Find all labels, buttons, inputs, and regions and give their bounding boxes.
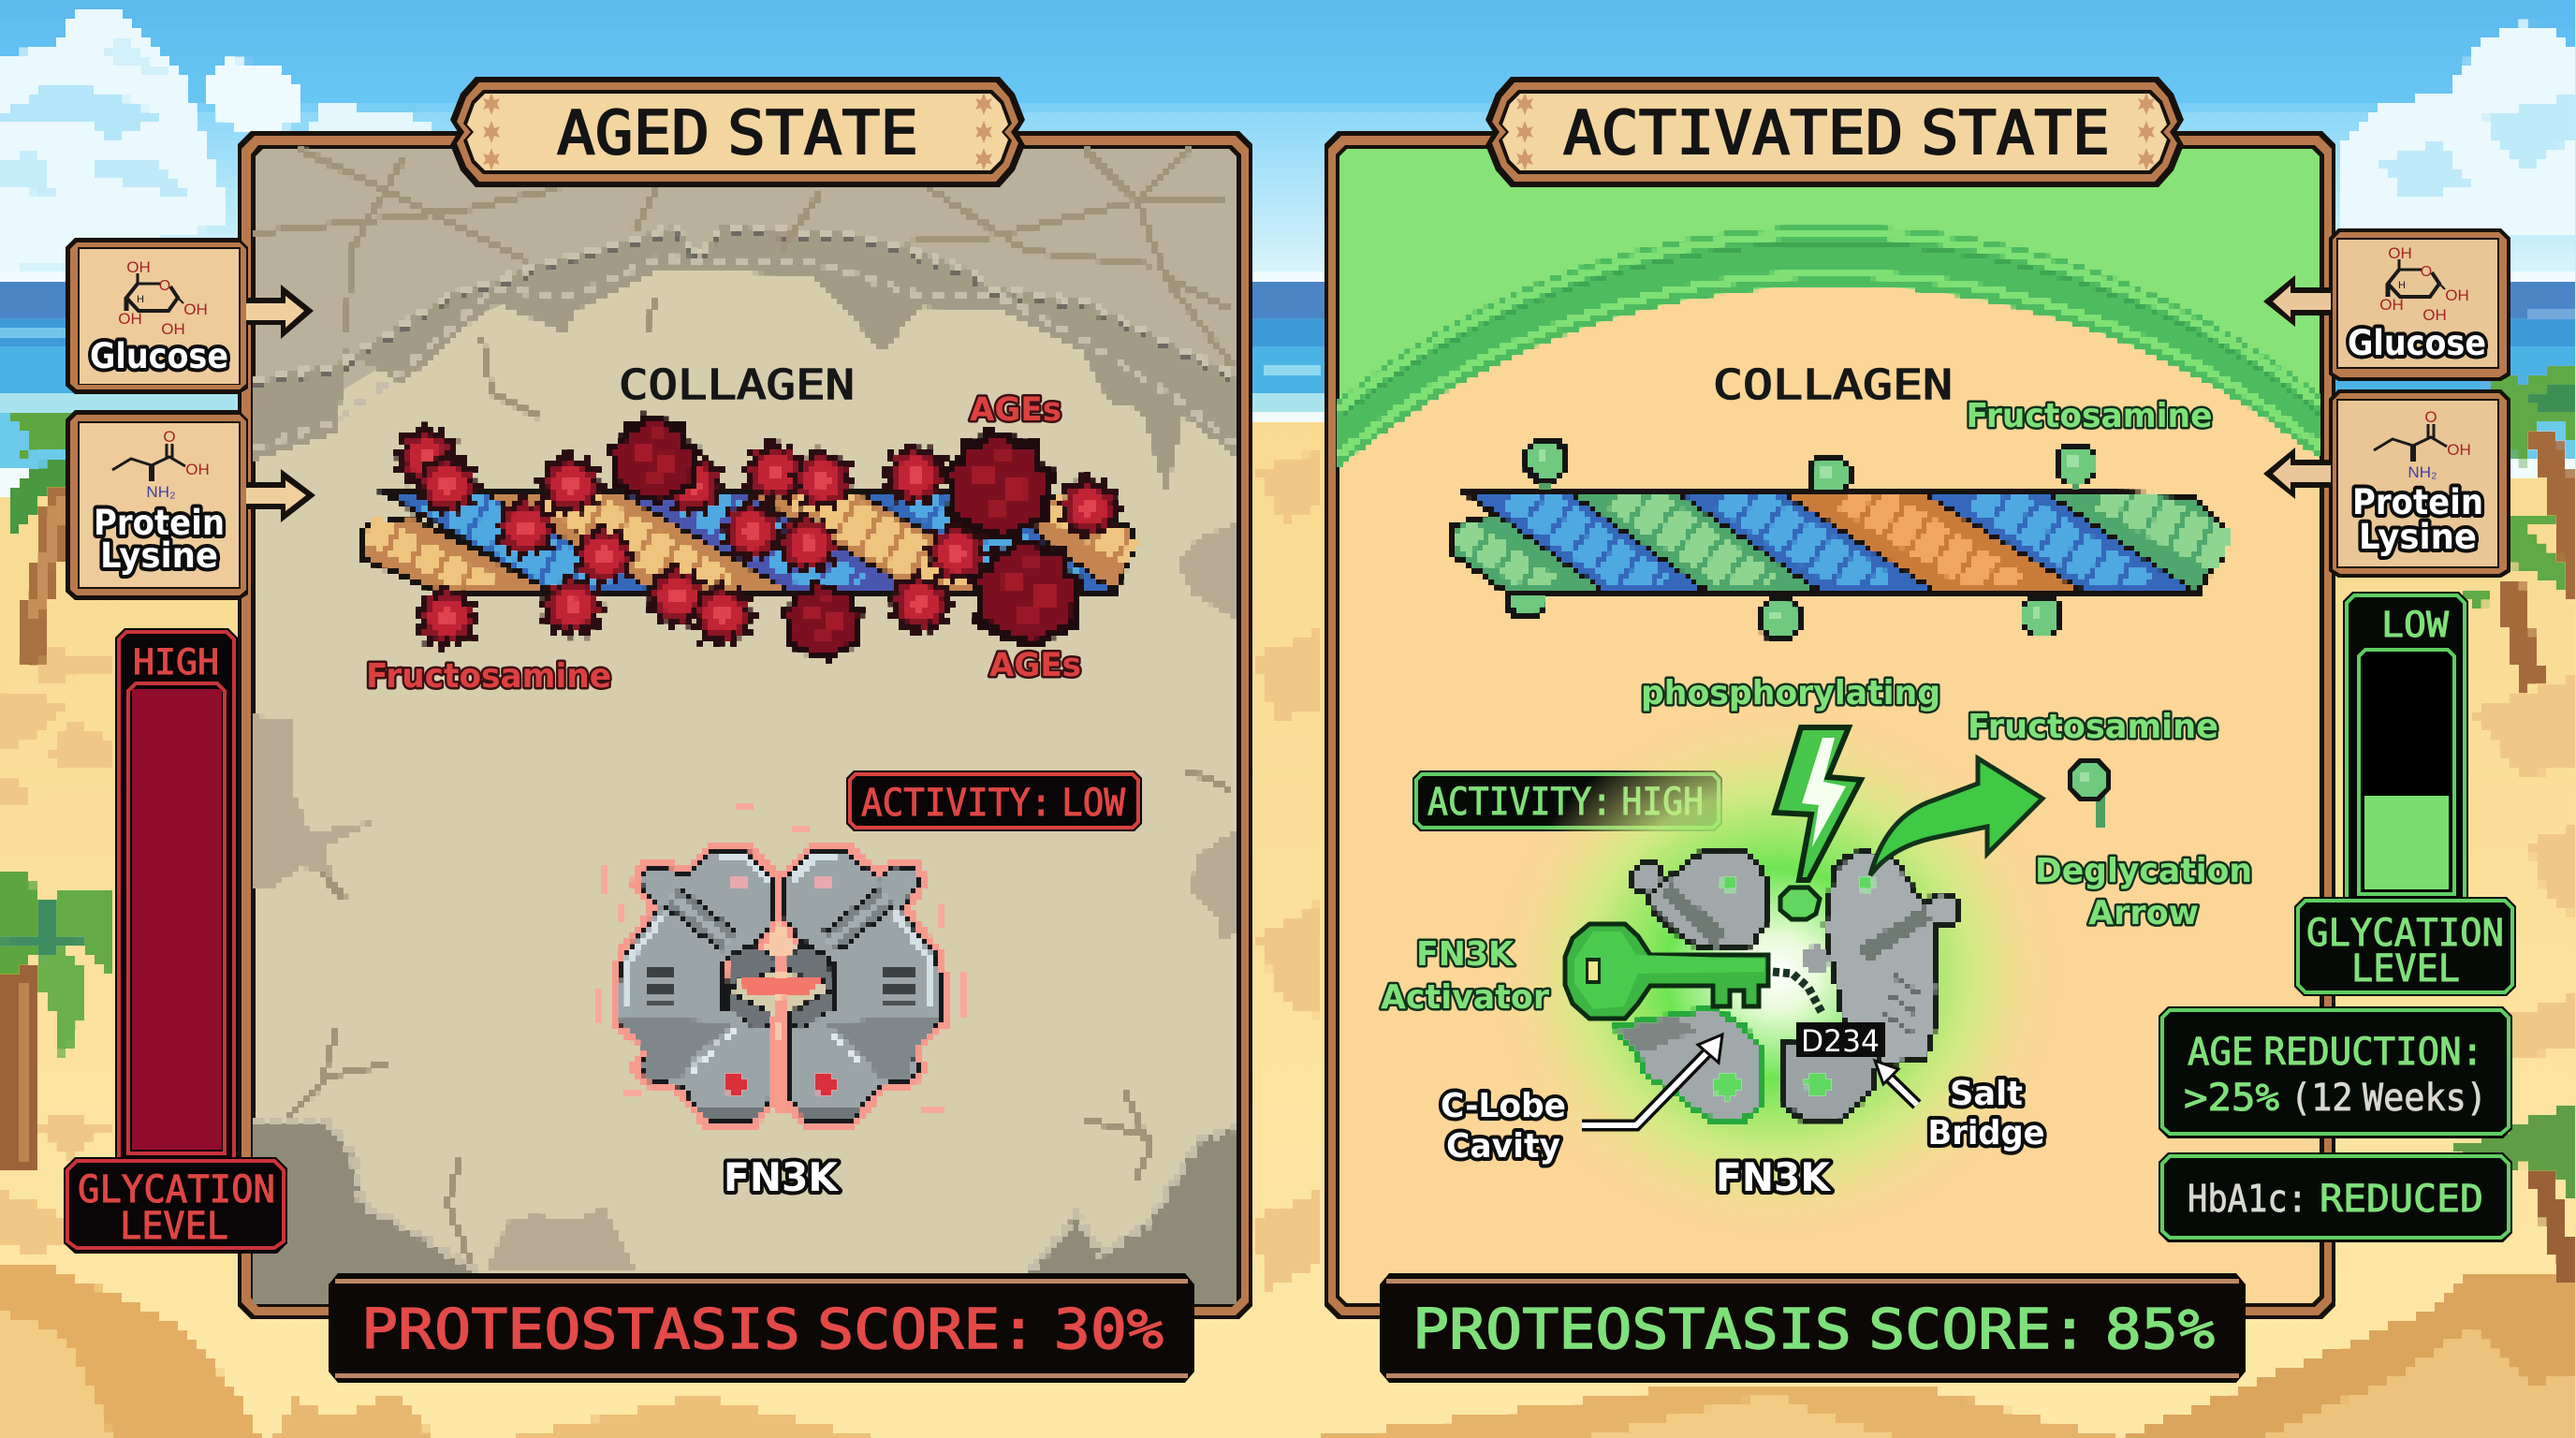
heading: collagen (aged): COLLAGEN [619, 361, 855, 409]
badge: activity high [1412, 770, 1722, 831]
badge: activity low [846, 770, 1142, 831]
label: FN3K activator: FN3K [1416, 935, 1515, 974]
label: C-lobe cavity: C-Lobe [1441, 1087, 1566, 1125]
input card: protein lysine (activated): Protein [2352, 482, 2483, 522]
gauge: glycation level high [115, 628, 238, 1161]
arrow: lysine into aged panel [246, 469, 315, 522]
stat box: HbA1c: HbA1c: [2188, 1178, 2307, 1221]
score bar: activated [1380, 1273, 2246, 1383]
shoreline corners [0, 408, 2576, 492]
fructosamine stalks and drops [1504, 438, 2098, 640]
gauge label: glycation level (aged): LEVEL [120, 1205, 228, 1248]
stat box: AGE reduction: >25% [2184, 1077, 2279, 1120]
gauge: glycation level high: HIGH [133, 642, 219, 682]
lower left lobe [1616, 1008, 1764, 1119]
icon: glucose molecule [118, 258, 208, 338]
icon: glucose molecule: OH [2379, 296, 2404, 314]
right lobe half [780, 850, 942, 1121]
arrow: glucose into aged panel [246, 285, 314, 339]
arrow: lysine into activated panel [2263, 448, 2331, 499]
surface cracks [256, 149, 1232, 1268]
healthy interior [1339, 286, 2320, 1303]
activation glow [1497, 712, 2058, 1236]
stat box: AGE reduction: AGE REDUCTION: [2188, 1031, 2483, 1074]
label: fructosamine top (activated): Fructosamine [1966, 397, 2213, 435]
stat box: AGE reduction: (12 Weeks) [2291, 1077, 2487, 1120]
label: FN3K (activated): FN3K [1716, 1154, 1831, 1200]
icon: glucose molecule: OH [183, 301, 208, 318]
stat box: HbA1c [2159, 1152, 2512, 1242]
input card: protein lysine (activated) [2329, 389, 2510, 578]
collagen fibre: repaired [1452, 438, 2224, 640]
icon: lysine molecule: NH₂ [2408, 463, 2437, 481]
twisted strands [1452, 492, 2224, 592]
collagen fibre with glycation damage [361, 413, 1132, 661]
palm tree: mid right [2459, 511, 2565, 688]
icon: glucose molecule: OH [126, 258, 151, 276]
left lobe half [618, 850, 780, 1121]
panel: activated state [1325, 131, 2335, 1319]
input card: protein lysine (aged): Lysine [100, 536, 218, 576]
weak glow sparks [595, 805, 966, 1110]
palm tree: upper right [2474, 362, 2576, 599]
label: salt bridge: Salt [1950, 1075, 2023, 1113]
icon: activator key [1565, 924, 1822, 1019]
gauge label: glycation level (activated) [2294, 897, 2516, 996]
stains [256, 524, 1237, 1271]
dunes [0, 1267, 2576, 1438]
label: FN3K (aged): FN3K [724, 1154, 839, 1200]
icon: glucose molecule: O [2421, 264, 2432, 280]
icon: released fructosamine [2068, 758, 2111, 828]
lower right lobe [1782, 1042, 1878, 1119]
banner: aged state: AGED STATE [557, 99, 918, 169]
label: AGEs top: AGEs [970, 391, 1061, 429]
callout arrow: salt bridge [1875, 1061, 1917, 1105]
stat box: HbA1c: REDUCED [2320, 1178, 2483, 1221]
banner: activated state [1486, 77, 2184, 187]
banner: aged state [450, 77, 1025, 187]
icon: lysine molecule: OH [2447, 441, 2471, 459]
panel: aged state [238, 131, 1252, 1319]
twisted strands [361, 492, 1132, 592]
score bar: activated: PROTEOSTASIS SCORE: 85% [1412, 1297, 2215, 1361]
icon: lightning bolt [1775, 727, 1861, 919]
label: FN3K activator [1381, 935, 1549, 1017]
label: phosphorylating: phosphorylating [1641, 674, 1940, 712]
cloud: upper left [0, 13, 431, 271]
gauge: glycation level low: LOW [2381, 605, 2450, 645]
label: salt bridge: Bridge [1928, 1114, 2044, 1152]
arrow: glucose into activated panel [2263, 275, 2331, 327]
cracked collagen band: aged [256, 227, 1237, 492]
label: AGEs bottom: AGEs [989, 647, 1081, 684]
icon: glucose molecule [2379, 244, 2469, 324]
gauge label: glycation level (aged): GLYCATION [78, 1168, 275, 1211]
icon: lysine molecule: O [2424, 408, 2437, 426]
icon: lysine molecule: O [163, 428, 176, 446]
label: fructosamine (aged): Fructosamine [366, 657, 611, 696]
icon: deglycation arrow [1870, 758, 2042, 875]
gauge label: glycation level (activated): GLYCATION [2306, 912, 2504, 955]
label: C-lobe cavity: Cavity [1446, 1127, 1560, 1166]
badge: D234 residue: D234 [1801, 1023, 1880, 1059]
icon: lysine molecule [2374, 408, 2471, 481]
icon: glucose molecule: OH [2388, 244, 2412, 262]
banner: activated state: ACTIVATED STATE [1563, 99, 2110, 169]
healthy collagen band [1339, 227, 2320, 466]
enzyme: FN3K active [1616, 850, 1958, 1119]
label: C-lobe cavity [1441, 1087, 1566, 1166]
palm tree: upper left [5, 409, 75, 669]
input card: protein lysine (aged): Protein [94, 503, 225, 543]
light interior [256, 248, 1237, 1303]
input card: glucose (activated) [2329, 228, 2510, 381]
enzyme: FN3K inactive [595, 805, 966, 1121]
label: fructosamine released: Fructosamine [1968, 708, 2218, 746]
gauge label: glycation level (aged) [64, 1157, 287, 1254]
sea [0, 268, 2576, 425]
palm tree: lower left [0, 873, 112, 1169]
input card: glucose (activated): Glucose [2348, 323, 2486, 363]
label: FN3K activator: Activator [1381, 978, 1549, 1017]
crumbling corners [256, 1123, 1237, 1303]
input card: protein lysine (aged) [66, 410, 248, 600]
input card: glucose (aged): Glucose [90, 336, 228, 376]
heading: collagen (activated): COLLAGEN [1713, 361, 1953, 409]
gauge label: glycation level (activated): LEVEL [2351, 947, 2460, 990]
icon: glucose molecule: OH [2445, 286, 2469, 304]
fructosamine adducts [392, 424, 1123, 652]
icon: glucose molecule: H [2398, 280, 2406, 291]
right arm lobe [1803, 852, 1958, 1064]
palm tree: lower right [2443, 1100, 2576, 1283]
icon: lysine molecule: OH [185, 461, 210, 478]
icon: glucose molecule: O [159, 278, 170, 294]
cloud: upper right [2340, 22, 2576, 234]
badge: activity low: ACTIVITY: LOW [861, 782, 1126, 825]
badge: activity high: ACTIVITY: HIGH [1427, 781, 1704, 824]
icon: lysine molecule: NH₂ [146, 483, 176, 501]
icon: glucose molecule: OH [2422, 306, 2447, 324]
icon: glucose molecule: OH [118, 310, 142, 328]
gauge: glycation level low [2343, 592, 2468, 899]
callout arrow: C-lobe cavity [1582, 1034, 1722, 1125]
sand [0, 423, 2576, 1438]
label: deglycation arrow: Arrow [2088, 894, 2199, 932]
input card: glucose (aged) [66, 238, 248, 394]
sand blotches [0, 449, 2576, 1292]
icon: glucose molecule: H [137, 294, 144, 305]
icon: lysine molecule [112, 428, 210, 501]
label: deglycation arrow [2035, 852, 2252, 932]
input card: protein lysine (activated): Lysine [2359, 517, 2477, 557]
score bar: aged [329, 1273, 1194, 1383]
stat box: AGE reduction [2159, 1006, 2512, 1138]
icon: glucose molecule: OH [161, 320, 185, 338]
AGE clumps [606, 413, 1086, 661]
upper left lobe [1632, 850, 1765, 948]
label: salt bridge [1928, 1075, 2044, 1152]
score bar: aged: PROTEOSTASIS SCORE: 30% [361, 1297, 1164, 1361]
label: deglycation arrow: Deglycation [2035, 852, 2252, 890]
